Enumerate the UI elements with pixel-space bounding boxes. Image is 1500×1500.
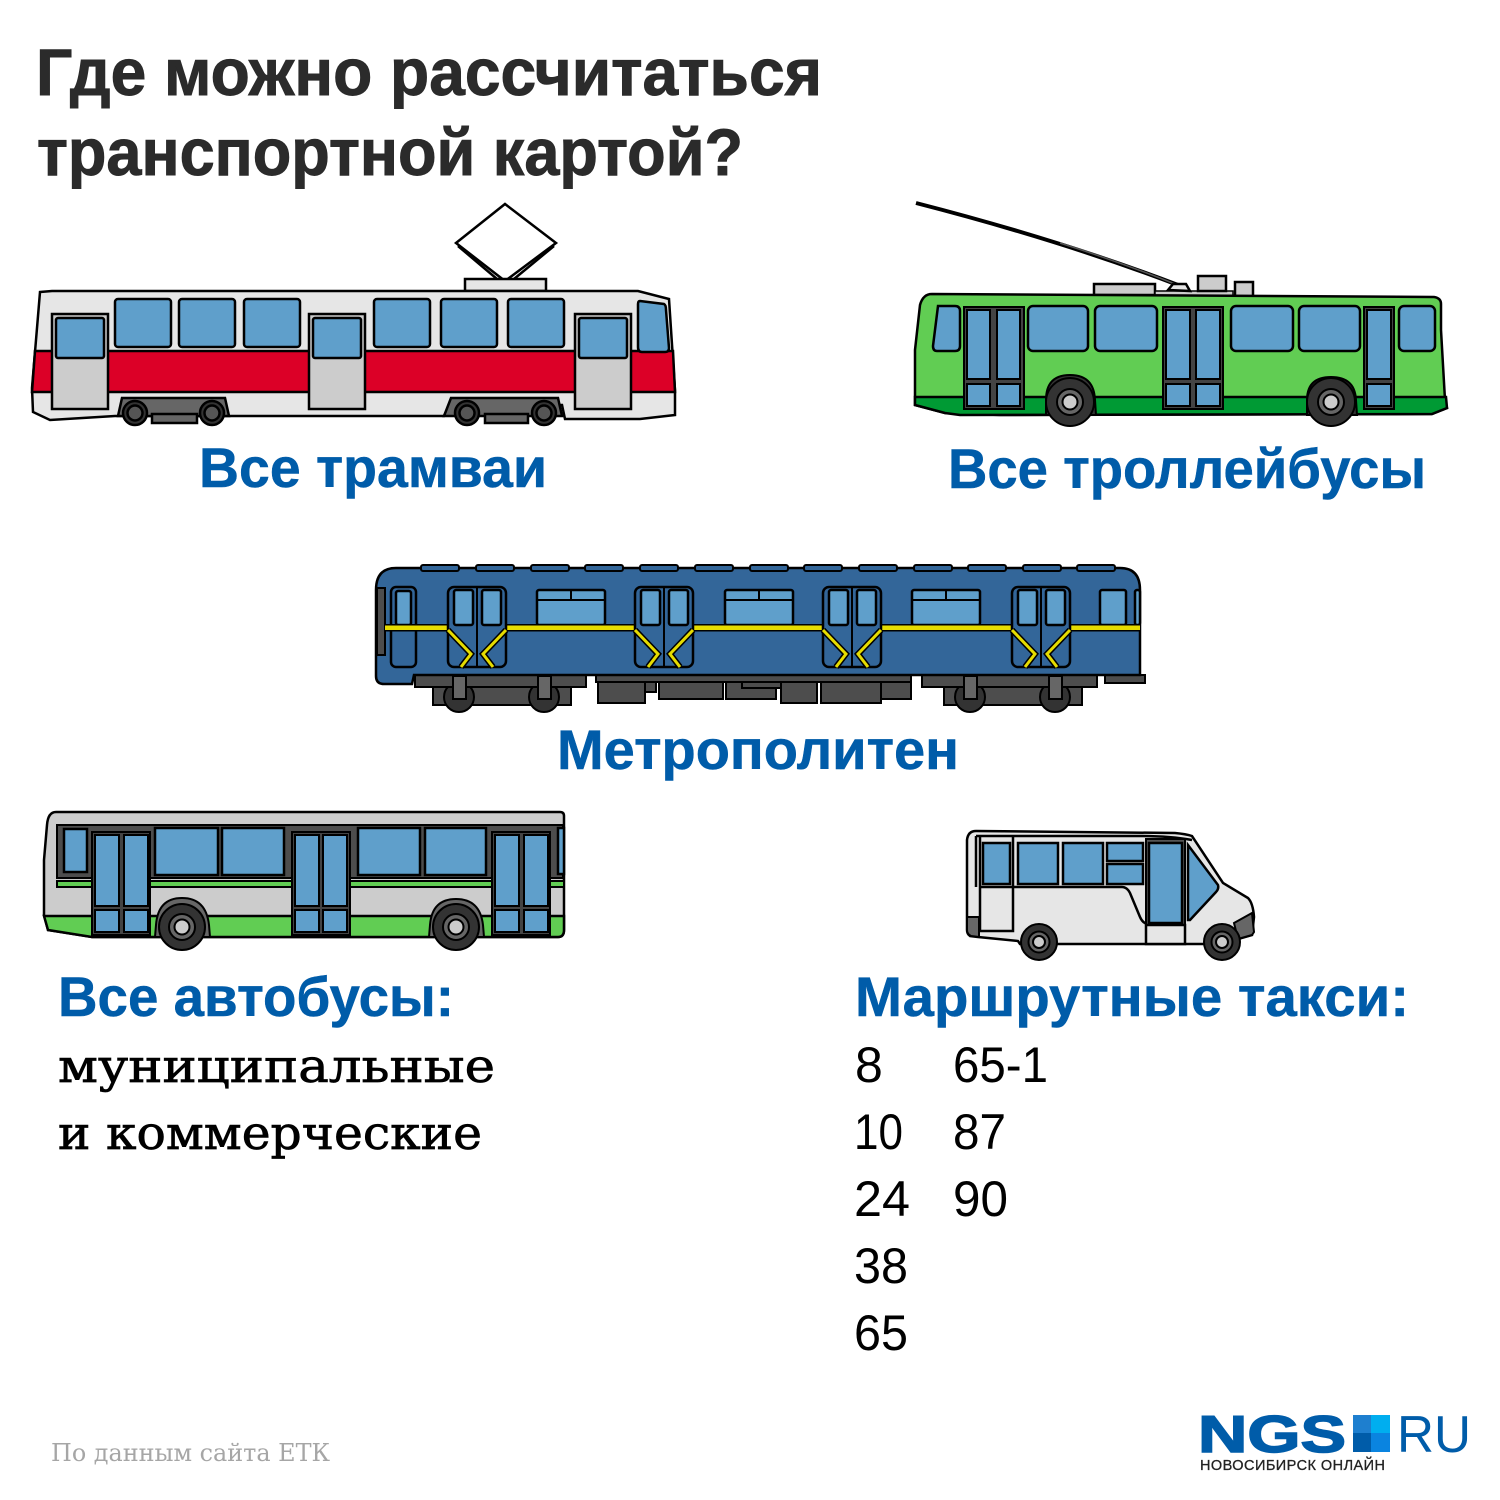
metro cab door <box>377 587 1140 667</box>
label: all trolleybuses: Все троллейбусы <box>948 437 1426 500</box>
route numbers: 10 <box>854 1104 903 1160</box>
bus green lower stripe <box>44 916 564 937</box>
logo: NGS.RU: RU <box>1397 1406 1471 1464</box>
title: транспортной картой? <box>37 115 743 189</box>
minibus body <box>967 831 1254 944</box>
trolley doors <box>964 307 1394 409</box>
icon: metro car <box>376 565 1145 712</box>
trolley windows <box>933 306 1435 351</box>
source note: По данным сайта ЕТК <box>51 1439 330 1467</box>
bus window strip <box>57 825 563 878</box>
trolley roof equipment <box>1094 276 1253 297</box>
route numbers: 24 <box>854 1171 910 1227</box>
tram body <box>32 291 675 420</box>
route numbers: 65 <box>854 1305 908 1361</box>
tram doors <box>52 314 631 409</box>
logo: NGS.RU: NGS <box>1198 1406 1346 1464</box>
trolley lower stripe <box>915 397 1447 415</box>
trolley pole <box>916 203 1178 285</box>
route numbers: 90 <box>953 1171 1008 1227</box>
logo square <box>1353 1415 1390 1452</box>
title: Где можно рассчитаться <box>36 35 822 109</box>
logo: NGS.RU: НОВОСИБИРСК ОНЛАЙН <box>1200 1456 1385 1474</box>
minibus front bumper <box>1234 913 1254 939</box>
minibus rear bumper <box>967 917 979 937</box>
minibus windows <box>983 843 1143 884</box>
metro body <box>376 568 1140 684</box>
metro yellow stripe <box>385 624 1140 632</box>
tram bogies <box>118 398 562 425</box>
bus doors <box>92 832 550 935</box>
label: minibus taxis: Маршрутные такси: <box>855 965 1409 1028</box>
metro windows <box>537 590 1126 625</box>
bus side stripe <box>57 881 564 887</box>
icon: trolleybus <box>915 203 1447 426</box>
label: metro: Метрополитен <box>557 718 959 781</box>
text: municipal and commercial <box>58 1039 495 1160</box>
route numbers <box>854 1037 1048 1361</box>
tram side windows <box>115 299 669 352</box>
route numbers: 65-1 <box>953 1037 1048 1093</box>
minibus windshield <box>1188 845 1218 920</box>
tram pantograph <box>456 204 556 291</box>
trolley wheels <box>1046 375 1357 426</box>
text: municipal and commercial: муниципальные <box>58 1039 495 1093</box>
icon: city bus <box>44 812 564 950</box>
minibus window frame <box>976 836 1192 931</box>
route numbers: 87 <box>953 1104 1006 1160</box>
metro doors <box>448 587 1070 667</box>
metro underframe <box>415 675 1145 712</box>
label: all buses: Все автобусы: <box>58 965 454 1028</box>
text: municipal and commercial: и коммерческие <box>58 1106 482 1160</box>
bus wheels <box>155 898 484 950</box>
title <box>36 35 822 189</box>
route numbers: 8 <box>855 1037 883 1093</box>
label: all trams: Все трамваи <box>199 436 547 499</box>
bus windows <box>64 828 564 875</box>
trolley body <box>915 294 1447 415</box>
icon: minibus <box>967 831 1254 960</box>
minibus wheels <box>1021 924 1240 960</box>
metro roof vents <box>421 565 1115 571</box>
route numbers: 38 <box>854 1238 908 1294</box>
icon: tram <box>32 204 675 425</box>
bus body <box>44 812 564 937</box>
logo: NGS.RU <box>1198 1406 1471 1474</box>
tram red stripe <box>32 351 675 392</box>
minibus door <box>1146 839 1185 944</box>
